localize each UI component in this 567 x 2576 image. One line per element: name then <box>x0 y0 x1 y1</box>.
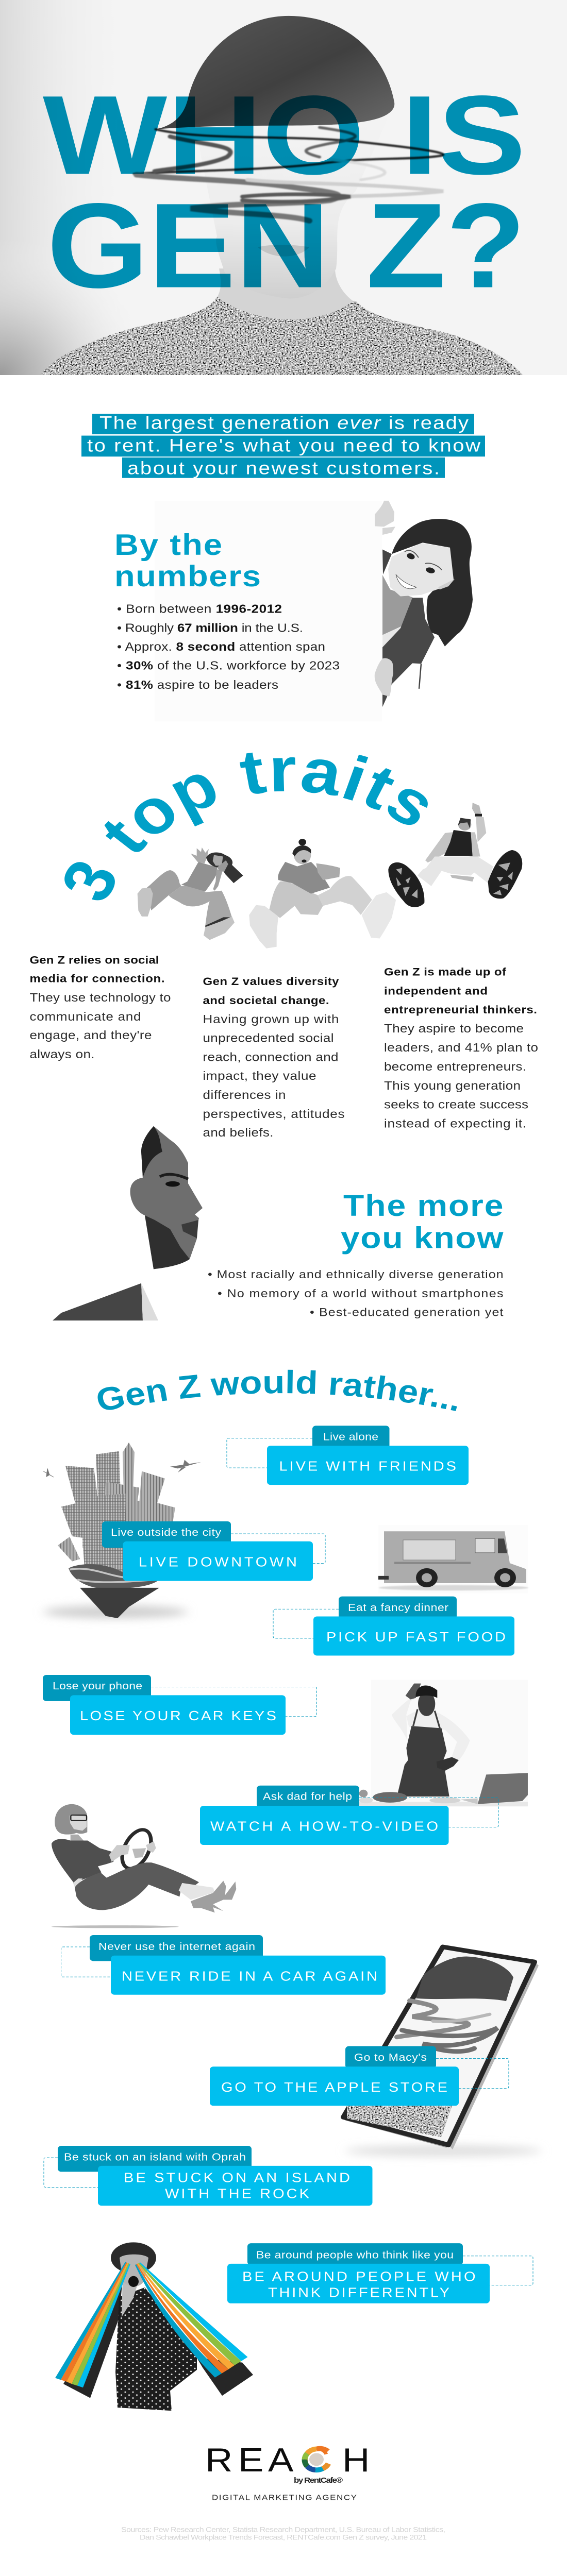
illustration: woman driving without a car <box>52 1804 236 1928</box>
logo: REACH by RentCafe: by RentCafe® <box>294 2476 343 2485</box>
trait column 2: Gen Z values diversity <box>203 975 339 988</box>
pill: watch a how-to video <box>200 1786 498 1845</box>
trait column 2: differences in <box>203 1089 286 1102</box>
dancer 2 <box>249 839 396 948</box>
illustration: phone showing glitched portrait <box>343 1947 541 2156</box>
trait column 2: unprecedented social <box>203 1032 334 1045</box>
neck <box>216 268 356 321</box>
face <box>214 223 338 270</box>
dancers illustration <box>138 803 522 948</box>
pill: go to the apple store: GO TO THE APPLE STORE <box>221 2079 447 2095</box>
pill: be around people who think differently: Be around people who think like you <box>256 2249 454 2261</box>
heading: numbers <box>114 560 261 592</box>
pill: pick up fast food <box>273 1597 514 1655</box>
heading: By the <box>114 528 222 561</box>
stat list: • 81% aspire to be leaders <box>117 679 278 691</box>
stat list: • Born between 1996-2012 <box>117 603 282 616</box>
trait column 2: reach, connection and <box>203 1051 338 1064</box>
sweater on screen <box>347 2106 452 2137</box>
title: WHO IS GEN Z?: GEN Z? <box>47 178 526 313</box>
facts list: • Most racially and ethnically diverse generation <box>208 1268 503 1281</box>
pill: stuck on an island with the rock: BE STUCK ON AN ISLAND <box>124 2170 350 2185</box>
stat list: • 30% of the U.S. workforce by 2023 <box>117 659 340 672</box>
pill: be around people who think differently: THINK DIFFERENTLY <box>268 2285 449 2300</box>
beam shadows <box>63 2278 123 2398</box>
woman peeking <box>375 501 473 707</box>
stat list <box>117 603 340 691</box>
logo: REACH by RentCafe: REAC H <box>205 2441 370 2479</box>
panel: the more you know <box>208 1189 504 1318</box>
stat list: • Approx. 8 second attention span <box>117 640 325 654</box>
heading: 3 top traits: 3 top traits <box>64 752 428 901</box>
pill: go to the apple store: Go to Macy's <box>354 2051 427 2063</box>
hair on screen <box>416 1956 513 2001</box>
trait column 2: impact, they value <box>203 1070 316 1082</box>
pill: stuck on an island with the rock: WITH THE ROCK <box>165 2186 309 2201</box>
sweater <box>40 297 523 375</box>
icon: logo ring <box>305 2449 328 2470</box>
trait column 3: leaders, and 41% plan to <box>384 1041 538 1055</box>
trait column 1: They use technology to <box>30 991 171 1004</box>
left beam <box>55 2262 130 2387</box>
pill: never ride in a car again: Never use the internet again <box>98 1940 255 1953</box>
heading <box>114 528 261 592</box>
trait column 3: seeks to create success <box>384 1098 528 1111</box>
trait column 1 <box>30 954 171 1061</box>
intro callout: about your newest customers. <box>127 458 440 478</box>
pill: be around people who think differently <box>227 2243 533 2303</box>
stat list: • Roughly 67 million in the U.S. <box>117 622 303 635</box>
title: WHO IS GEN Z? <box>43 73 526 313</box>
trait column 3: This young generation <box>384 1080 521 1093</box>
heading: you know <box>341 1222 504 1255</box>
figure <box>115 2287 197 2411</box>
panel: by the numbers <box>114 501 473 721</box>
trait column 1: communicate and <box>30 1010 141 1024</box>
trait column 3: independent and <box>384 985 488 997</box>
pill: never ride in a car again <box>61 1935 386 1995</box>
trait column 3 <box>384 966 538 1130</box>
intro callout: The largest generation ever is ready <box>99 412 469 433</box>
trait column 3: instead of expecting it. <box>384 1117 526 1130</box>
illustration: man with rainbow beams from eyes <box>55 2242 253 2411</box>
sources: Dan Schawbel Workplace Trends Forecast, RENTCafe.com Gen Z survey, June 2021 <box>140 2533 427 2541</box>
top hand <box>375 501 395 535</box>
pill: pick up fast food: PICK UP FAST FOOD <box>326 1630 506 1645</box>
pill: live with friends: Live alone <box>323 1431 378 1443</box>
trait column 2: perspectives, attitudes <box>203 1108 345 1121</box>
glitch waves <box>134 127 443 221</box>
pill: go to the apple store <box>210 2046 509 2106</box>
pill: lose your car keys: LOSE YOUR CAR KEYS <box>80 1708 276 1723</box>
hair <box>156 16 394 129</box>
dancer 3 <box>388 803 522 907</box>
intro callout: to rent. Here's what you need to know <box>87 435 481 455</box>
heading: The more <box>343 1189 503 1223</box>
sources: Sources: Pew Research Center, Statista Research Department, U.S. Bureau of Labor Statistics, <box>121 2526 445 2534</box>
right beam <box>135 2262 247 2378</box>
facts list: • No memory of a world without smartphones <box>218 1287 503 1300</box>
illustration: chef with laptop <box>359 1680 528 1806</box>
pill: never ride in a car again: NEVER RIDE IN A CAR AGAIN <box>122 1969 377 1984</box>
logo: REACH by RentCafe <box>205 2441 370 2502</box>
intro callout <box>81 412 485 478</box>
wave on screen <box>397 2001 497 2052</box>
trait column 3: Gen Z is made up of <box>384 966 506 978</box>
trait column 2: and beliefs. <box>203 1127 273 1140</box>
heading <box>341 1189 504 1255</box>
trait column 2: and societal change. <box>203 994 329 1007</box>
lips <box>258 245 309 257</box>
facts list <box>208 1268 504 1318</box>
pill: live downtown <box>102 1521 325 1581</box>
illustration: food truck <box>378 1525 528 1593</box>
trait column 1: Gen Z relies on social <box>30 954 159 966</box>
icon: airplane right <box>170 1460 201 1472</box>
pill: watch a how-to video: WATCH A HOW-TO-VIDEO <box>210 1819 438 1834</box>
trait column 1: media for connection. <box>30 973 164 985</box>
pill: be around people who think differently: BE AROUND PEOPLE WHO <box>242 2269 475 2284</box>
trait column 2 <box>203 975 345 1140</box>
icon: airplane left <box>43 1468 54 1477</box>
trait column 1: always on. <box>30 1048 94 1061</box>
pill: live downtown: Live outside the city <box>111 1526 221 1538</box>
pill: live downtown: LIVE DOWNTOWN <box>139 1554 297 1569</box>
pill: stuck on an island with the rock: Be stuck on an island with Oprah <box>64 2151 246 2163</box>
pill: stuck on an island with the rock <box>44 2146 372 2206</box>
dancer 1 <box>138 848 243 940</box>
heading: Gen Z would rather: Gen Z would rather... <box>98 1369 457 1411</box>
trait column 3: entrepreneurial thinkers. <box>384 1004 537 1015</box>
trait column 3: become entrepreneurs. <box>384 1060 526 1074</box>
sources <box>121 2526 445 2541</box>
facts list: • Best-educated generation yet <box>310 1306 504 1318</box>
drawstring <box>419 664 421 689</box>
trait column 3: They aspire to become <box>384 1022 524 1036</box>
pill: watch a how-to video: Ask dad for help <box>263 1790 352 1802</box>
pill: lose your car keys <box>43 1675 316 1735</box>
title: WHO IS GEN Z?: WHO IS <box>43 73 526 198</box>
pill: pick up fast food: Eat a fancy dinner <box>348 1601 448 1614</box>
hero: photo of woman with glitched face <box>0 0 567 375</box>
pill: live with friends: LIVE WITH FRIENDS <box>279 1459 456 1473</box>
lower hand <box>375 658 393 697</box>
pill: lose your car keys: Lose your phone <box>53 1680 142 1692</box>
pill: live with friends <box>227 1426 469 1485</box>
trait column 1: engage, and they're <box>30 1029 152 1042</box>
logo: REACH by RentCafe: DIGITAL MARKETING AGENCY <box>212 2493 357 2502</box>
trait column 2: Having grown up with <box>203 1013 339 1026</box>
half-face portrait <box>53 1126 203 1320</box>
illustration: floating city <box>43 1443 201 1618</box>
